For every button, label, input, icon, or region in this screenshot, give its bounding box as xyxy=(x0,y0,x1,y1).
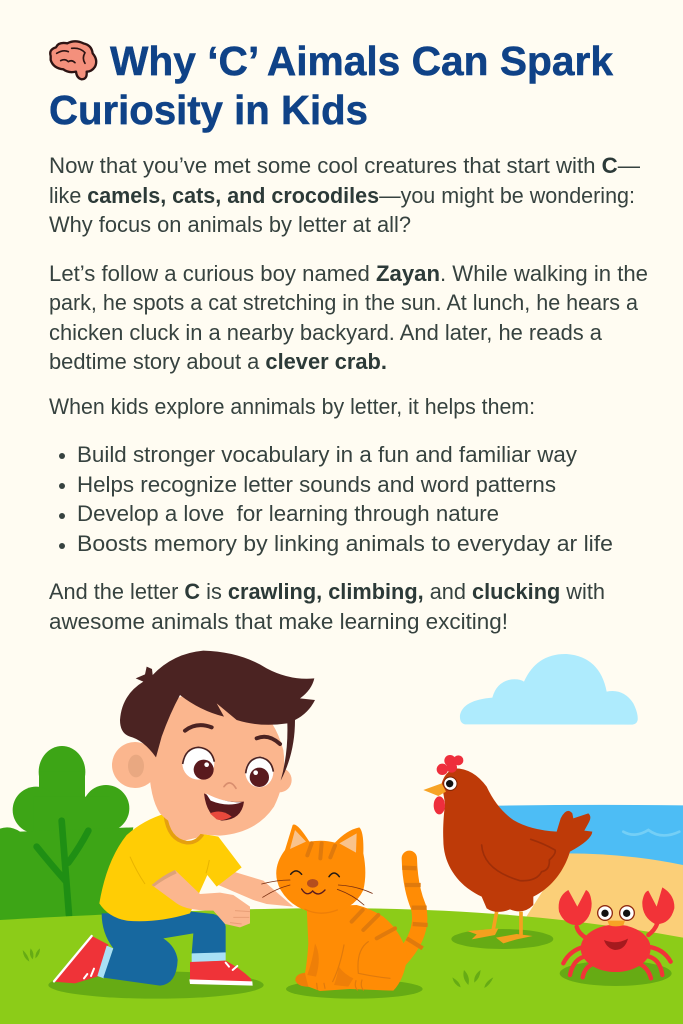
hen: wattle xyxy=(434,796,445,814)
boy: yellow shirt xyxy=(99,813,242,921)
sand beach xyxy=(520,853,683,947)
text block: closing paragraph xyxy=(49,579,605,634)
boy: trousers xyxy=(102,912,226,986)
text block: intro paragraph: Why focus on animals by letter at all? xyxy=(49,212,411,237)
cat xyxy=(262,825,428,991)
crab: mouth xyxy=(604,939,628,950)
boy: sleeve shadow xyxy=(152,870,177,887)
bullet list: Boosts memory by linking animals to everyday ar life xyxy=(77,531,613,556)
boy: left ear xyxy=(112,742,158,788)
boy: front arm xyxy=(152,870,250,927)
ground shadows xyxy=(48,929,672,999)
cat: head xyxy=(276,825,365,914)
crab xyxy=(559,887,674,978)
boy: nose xyxy=(224,783,236,788)
bullet list: Develop a love for learning through nature xyxy=(77,501,499,526)
title: Why ‘C’ Aimals Can Spark xyxy=(110,38,613,84)
hen: body xyxy=(442,768,592,912)
boy: reaching arm xyxy=(218,872,293,907)
text block: Zayan paragraph xyxy=(49,261,648,374)
text block: Zayan paragraph: bedtime story about a clever crab. xyxy=(49,349,387,374)
crab: shell highlight xyxy=(607,921,625,926)
boy xyxy=(53,651,315,986)
hen: legs xyxy=(467,912,533,943)
cat: face xyxy=(262,871,372,905)
text block: list intro: When kids explore annimals by letter, it helps them: xyxy=(49,394,535,419)
cat: rear paw xyxy=(295,973,310,987)
text block: intro paragraph: like camels, cats, and crocodiles—you might be wondering: xyxy=(49,183,635,208)
grass ground xyxy=(0,908,683,1024)
boy: head xyxy=(148,690,284,836)
boy: shirt collar xyxy=(165,815,203,843)
cat: body xyxy=(305,905,407,991)
text block: intro paragraph: Now that you’ve met some cool creatures that start with C— xyxy=(49,153,640,178)
cloud xyxy=(460,654,638,725)
boy: mouth xyxy=(204,793,244,821)
text block: closing paragraph: awesome animals that make learning exciting! xyxy=(49,609,508,634)
bush xyxy=(0,746,133,927)
text block: Zayan paragraph: chicken cluck in a nearby backyard. And later, he reads a xyxy=(49,320,603,345)
title: Curiosity in Kids xyxy=(49,87,368,133)
hen: wing xyxy=(482,839,555,881)
bullet list: Build stronger vocabulary in a fun and familiar way xyxy=(77,442,577,467)
crab: legs and arms xyxy=(563,923,671,978)
title xyxy=(49,38,613,133)
icon: brain xyxy=(50,41,96,79)
cat: body shading xyxy=(307,943,353,987)
grass tufts xyxy=(23,948,493,988)
boy: neck xyxy=(167,813,203,842)
boy: right eye xyxy=(245,757,273,787)
boy: back shoe xyxy=(53,935,108,983)
boy: front shoe xyxy=(189,961,253,986)
boy: front sock xyxy=(192,952,226,962)
boy: shirt folds xyxy=(130,857,209,884)
bullet list xyxy=(59,442,613,556)
crab: body xyxy=(581,925,651,972)
boy: finger lines xyxy=(230,911,250,924)
cat: body stripes and legs xyxy=(317,910,395,990)
bullet list: Helps recognize letter sounds and word patterns xyxy=(77,472,556,497)
boy: left eye xyxy=(182,747,214,780)
text block: closing paragraph: And the letter C is crawling, climbing, and clucking with xyxy=(49,579,605,604)
sea xyxy=(497,805,683,880)
crab: left claw xyxy=(559,890,592,925)
hen: beak xyxy=(423,783,446,796)
illustration: boy with animals in a park xyxy=(0,651,683,1024)
boy: back sock xyxy=(97,946,113,978)
hen xyxy=(423,755,592,943)
cat: tail xyxy=(400,858,428,960)
boy: eyebrows xyxy=(185,725,280,744)
boy: right ear xyxy=(267,768,292,792)
text block: Zayan paragraph: Let’s follow a curious boy named Zayan. While walking in the xyxy=(49,261,648,286)
boy: hair xyxy=(120,651,315,781)
hen: eye xyxy=(444,777,457,790)
text block: intro paragraph xyxy=(49,153,640,237)
hen: comb xyxy=(437,755,463,775)
text block: Zayan paragraph: park, he spots a cat stretching in the sun. At lunch, he hears a xyxy=(49,290,639,315)
crab: eyes xyxy=(598,906,634,920)
crab: right claw xyxy=(642,887,674,924)
